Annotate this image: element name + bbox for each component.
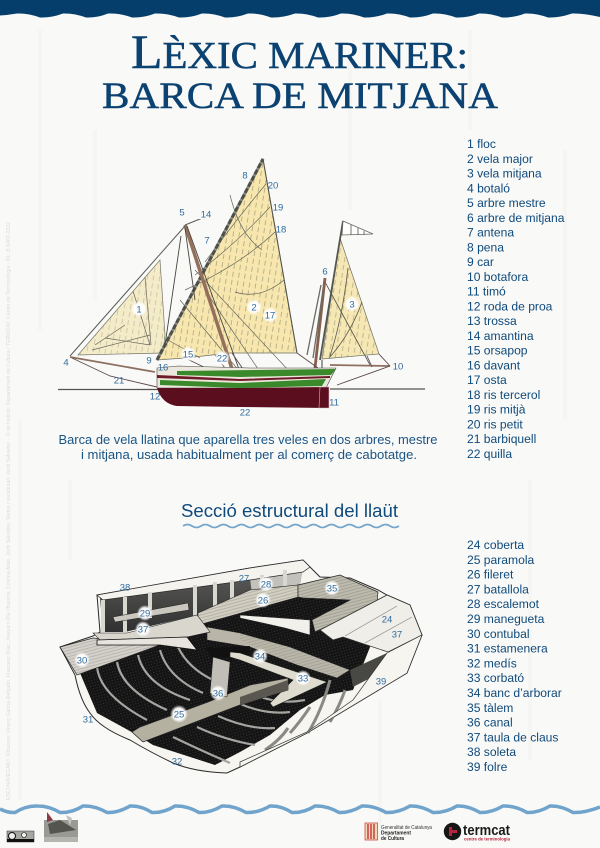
stern dark frame [350,653,387,687]
vocabulary list: section: 38 soleta [467,745,516,759]
vocabulary list: sailing boat: 15 orsapop [467,344,528,358]
vocabulary list: section: 30 contubal [467,627,530,641]
vocabulary list: sailing boat: 14 amantina [467,329,534,343]
TERMCAT logo: centre de terminologia [464,836,510,842]
top wave band [0,0,600,18]
vocabulary list: section [467,538,562,774]
pennant [342,221,373,235]
vocabulary list: section: 25 paramola [467,553,535,567]
vocabulary list: sailing boat: 10 botafora [467,270,528,284]
boat labels: 17 [265,310,275,322]
vocabulary list: sailing boat [467,137,565,461]
boat labels: 1 [136,304,142,316]
section labels: 24 [382,614,392,626]
vocabulary list: sailing boat: 7 antena [467,226,514,240]
vocabulary list: sailing boat: 13 trossa [467,314,517,328]
boat labels: 6 [322,266,328,278]
vocabulary list: sailing boat: 8 pena [467,240,504,254]
mast hole block [205,646,250,658]
section labels: 37 [392,630,402,640]
section labels [74,574,402,768]
main mast [185,225,233,372]
upper diagonal beam [207,627,350,678]
vocabulary list: section: 33 corbató [467,671,524,685]
mast step 36 [210,657,230,697]
vocabulary list: sailing boat: 17 osta [467,373,507,387]
structural section illustration [60,560,422,773]
TERMCAT logo: termcat [463,823,510,839]
boat labels: 11 [329,398,339,408]
mizzen sail [322,238,379,365]
boat labels: 15 [183,350,193,360]
hull outline [60,560,422,773]
section labels: 26 [258,596,268,606]
vocabulary list: sailing boat: 12 roda de proa [467,299,553,313]
bench 35 [298,575,378,632]
boat labels: 21 [114,376,124,386]
vocabulary list: sailing boat: 19 ris mitjà [467,403,526,417]
section labels: 29 [140,608,150,620]
museum logo [44,812,78,842]
Generalitat logo: Generalitat de Catalunya [381,825,433,831]
section labels: 38 [120,582,130,594]
vocabulary list: sailing boat: 9 car [467,255,494,269]
description: Barca de vela llatina que aparella tres veles en dos arbres, mestre [58,433,438,447]
vocabulary list: sailing boat: 20 ris petit [467,418,523,432]
section labels: 36 [213,688,223,700]
beam 37 [93,615,210,640]
boat labels: 5 [179,208,185,218]
boat labels: 22 [240,408,250,418]
vocabulary list: sailing boat: 6 arbre de mitjana [467,211,565,225]
vocabulary list: sailing boat: 5 arbre mestre [467,196,546,210]
section labels: 31 [83,714,93,726]
vocabulary list: section: 35 tàlem [467,701,513,715]
section labels: 28 [261,580,271,590]
section labels: 27 [239,574,249,584]
vocabulary list: sailing boat: 4 botaló [467,181,510,195]
vocabulary list: section: 27 batallola [467,582,529,596]
section labels: 35 [327,584,337,594]
boat labels: 19 [273,202,283,214]
licence badge [7,831,34,842]
boat labels: 4 [63,358,69,368]
vocabulary list: section: 32 medís [467,656,517,670]
Generalitat logo: Departament [381,830,411,836]
title: BARCA DE MITJANA [102,76,498,117]
vocabulary list: sailing boat: 1 floc [467,137,496,151]
vocabulary list: section: 31 estamenera [467,642,548,656]
boat labels: 9 [146,356,152,366]
hull [157,387,328,408]
green strakes [160,369,336,388]
side hull planking [240,635,422,767]
boat labels: 3 [349,300,355,310]
rigging triangle and spars [70,357,390,372]
water line [58,388,425,390]
dark interior [80,597,372,765]
beam 25 [132,678,288,742]
boat labels: 8 [242,170,248,182]
boat labels [63,170,403,418]
deck gear [157,366,336,388]
section heading: Secció estructural del llaüt [181,501,398,521]
section labels: 39 [376,676,386,688]
section labels: 30 [77,656,87,666]
boat labels: 20 [268,180,278,192]
description [58,433,438,462]
bulwark panels [100,567,303,632]
boat labels: 7 [204,236,210,246]
Generalitat logo [365,823,433,842]
left ribs [97,647,305,763]
vocabulary list: section: 29 manegueta [467,612,545,626]
rudder [319,387,329,408]
fore sail [78,260,165,355]
boat labels: 10 [393,362,403,372]
boat labels: 22 [217,354,227,364]
vocabulary list: section: 37 taula de claus [467,730,558,744]
boat labels: 2 [251,302,257,314]
right ribs [265,680,345,750]
sailing boat illustration [58,159,425,408]
title [102,26,498,117]
foredeck 24 [320,595,422,652]
vocabulary list: section: 26 fileret [467,568,514,582]
vocabulary list: sailing boat: 3 vela mitjana [467,166,542,180]
credits vertical text: ESCI NAVEGANT. Dibuixos: Vicenç García-Delgado, Francesc Díaz, Joaquim Pla i Barona, Cristina Alías, Jordi Salvador. Textos i vocabulari: Jordi Salvador. - © de l'edició: Departament de Cultura / TERMCAT, Centre de Terminologia - DL: B 8463-2022 [5,222,12,800]
vocabulary list: sailing boat: 16 davant [467,358,521,372]
white bench beam [240,615,310,635]
vocabulary list: sailing boat: 21 barbiquell [467,432,536,446]
boat labels: 18 [276,224,286,236]
boat labels: 12 [150,392,160,402]
Generalitat logo: de Cultura [381,836,404,842]
vocabulary list: sailing boat: 22 quilla [467,447,512,461]
plank 26 [198,585,298,625]
vocabulary list: section: 36 canal [467,716,513,730]
title: LÈXIC MARINER: [131,26,468,79]
deck 30 [60,638,160,675]
vocabulary list: section: 34 banc d’arborar [467,686,562,700]
vocabulary list: sailing boat: 2 vela major [467,152,533,166]
section labels: 37 [138,624,148,636]
bottom wave [0,806,600,813]
vocabulary list: sailing boat: 11 timó [467,285,506,299]
vocabulary list: section: 24 coberta [467,538,524,552]
main sail [157,159,297,372]
boat labels: 16 [158,362,168,374]
boat labels: 14 [201,210,211,220]
section labels: 25 [174,710,184,720]
mizzen mast and yard [315,278,325,368]
section labels: 32 [172,756,182,768]
TERMCAT logo [444,823,510,842]
cross stave 29 [113,603,189,622]
thwart 33/34 [230,652,327,707]
vocabulary list: section: 28 escalemot [467,597,540,611]
vocabulary list: section: 39 folre [467,760,508,774]
main yard [157,159,263,360]
section labels: 33 [298,674,308,684]
red strake [157,375,330,381]
section labels: 34 [255,652,265,662]
vocabulary list: sailing boat: 18 ris tercerol [467,388,540,402]
description: i mitjana, usada habitualment per al comerç de cabotatge. [81,448,417,462]
